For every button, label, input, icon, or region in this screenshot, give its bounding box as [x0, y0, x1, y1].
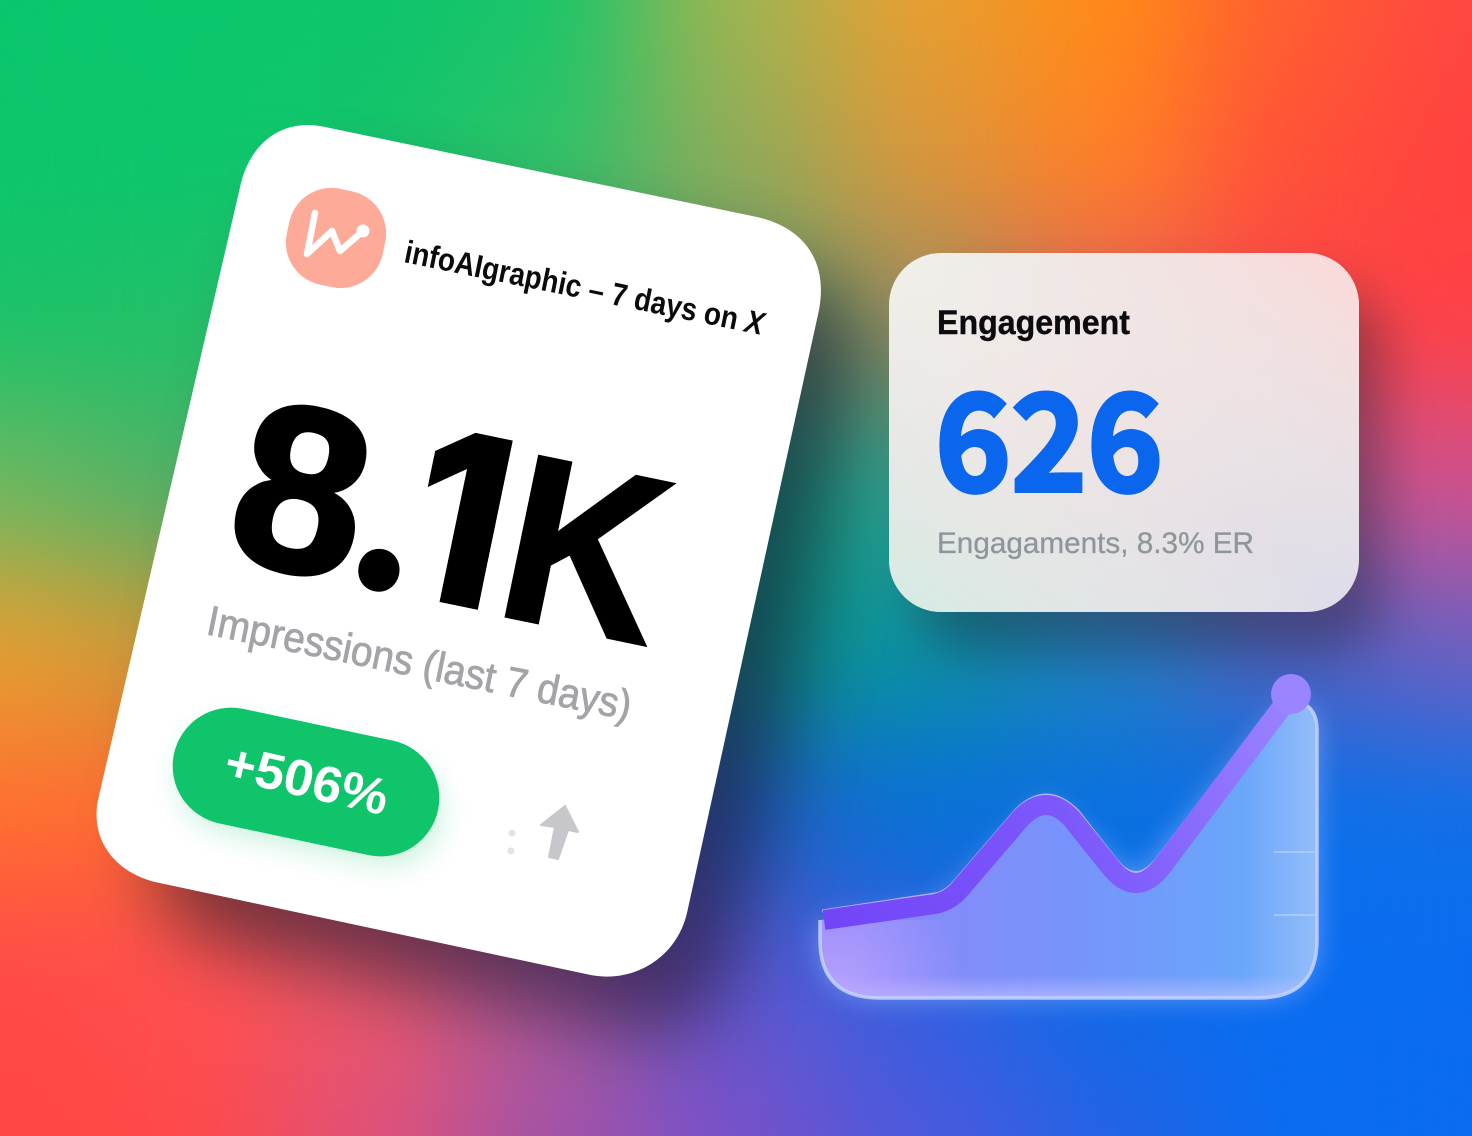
chart area fill [820, 700, 1317, 998]
big number: 8.1K: 8 [211, 348, 393, 633]
axis ticks [1274, 852, 1315, 915]
area chart [820, 674, 1317, 998]
panel tint [889, 253, 1359, 612]
chart glow [820, 700, 1317, 998]
icon: logo badge [278, 180, 394, 296]
chart bottom highlight [820, 920, 1317, 998]
engagement heading: Engagement [937, 304, 1130, 342]
big number: 8.1K [234, 404, 677, 648]
icon: up arrow [541, 806, 578, 859]
engagement caption: Engagaments, 8.3% ER [937, 527, 1254, 560]
panel: engagement [889, 253, 1359, 612]
big number: 8.1K: . [330, 361, 454, 650]
chart outline [820, 705, 1317, 998]
chart corner tint [820, 920, 960, 998]
panel: impressions card [97, 125, 821, 977]
impressions caption: Impressions (last 7 days) [203, 597, 636, 729]
trend line [824, 695, 1291, 920]
big number: 626: 626 [935, 336, 1163, 530]
card shadow [138, 172, 876, 1048]
big number: 8.1K: K [482, 405, 689, 695]
trend line highlight [822, 688, 1287, 911]
trend end dot [1271, 674, 1311, 714]
card title: infoAIgraphic – 7 days on X [402, 234, 769, 342]
panel background [889, 253, 1359, 612]
card shape [97, 125, 821, 977]
growth pill [162, 697, 450, 867]
growth pill: +506% [220, 733, 394, 826]
pill shadow [172, 719, 448, 871]
engagement panel shadow [920, 292, 1382, 652]
big number: 8.1K: 1 [371, 381, 554, 667]
decorative colon dots [508, 830, 516, 854]
